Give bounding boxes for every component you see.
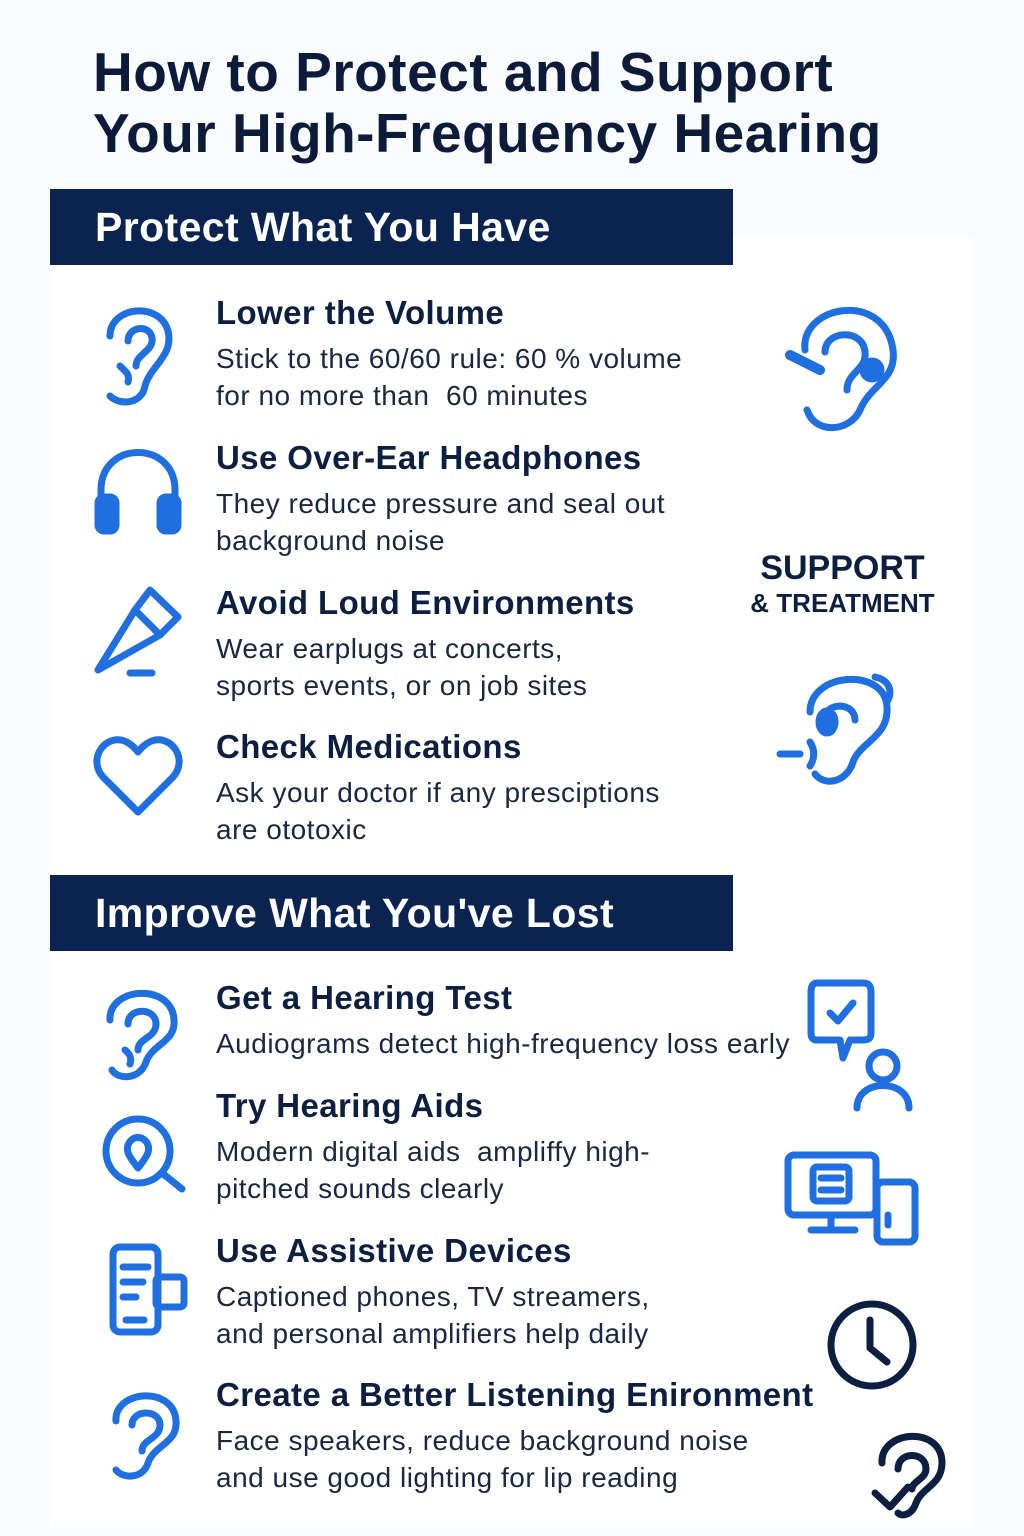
icon: ear 4 [112,1392,180,1480]
item: medications [216,728,660,845]
title: Your High-Frequency Hearing [93,102,882,164]
item: avoid loud: sports events, or on job sites [216,670,587,701]
item: listening environment: and use good lighting for lip reading [216,1462,678,1493]
card background [50,237,975,1527]
title: How to Protect and Support [93,41,833,103]
support label: SUPPORT [760,549,925,587]
item: lower volume: for no more than 60 minutes [216,380,588,411]
item: assistive [216,1232,650,1349]
item: hearing test: Audiograms detect high-frequency loss early [216,1028,790,1059]
item: listening environment [216,1376,814,1493]
item: headphones [216,439,665,556]
item: avoid loud: Avoid Loud Environments [216,584,635,621]
icon: ear [106,307,172,406]
item: listening environment: Face speakers, reduce background noise [216,1425,749,1456]
banner: improve [50,875,733,951]
item: hearing aids: pitched sounds clearly [216,1173,504,1204]
support label: & TREATMENT [750,588,935,618]
banner: improve: Improve What You've Lost [95,890,614,936]
right icon: ear check [872,1432,946,1518]
item: assistive: and personal amplifiers help daily [216,1318,649,1349]
item: avoid loud: Wear earplugs at concerts, [216,633,563,664]
item: medications: are ototoxic [216,814,367,845]
icon: heart [93,736,183,816]
item: lower volume [216,294,682,411]
icon: headphones [94,449,182,534]
banner: protect [50,189,733,265]
item: assistive: Captioned phones, TV streamers, [216,1281,650,1312]
item: medications: Ask your doctor if any presciptions [216,777,660,808]
item: hearing aids [216,1087,650,1204]
item: medications: Check Medications [216,728,522,765]
banner: protect: Protect What You Have [95,204,551,250]
item: listening environment: Create a Better Listening Enironment [216,1376,814,1413]
item: hearing aids: Modern digital aids ampliffy high- [216,1136,650,1167]
right icon: ear large [785,306,897,432]
item: headphones: Use Over-Ear Headphones [216,439,642,476]
item: hearing test: Get a Hearing Test [216,979,512,1016]
item: hearing aids: Try Hearing Aids [216,1087,483,1124]
icon: earplug [94,586,182,676]
title [93,41,882,164]
right icon: computer tablet [784,1152,918,1246]
item: avoid loud [216,584,635,701]
right icon: chat person [808,980,912,1112]
right icon: clock [828,1300,916,1390]
item: headphones: They reduce pressure and seal out [216,488,665,519]
item: headphones: background noise [216,525,445,556]
icon: phone devices [110,1244,188,1336]
item: lower volume: Lower the Volume [216,294,504,331]
icon: search pin [102,1116,186,1192]
support label [750,549,935,618]
item: hearing test [216,979,790,1059]
item: assistive: Use Assistive Devices [216,1232,572,1269]
item: lower volume: Stick to the 60/60 rule: 60 % volume [216,343,682,374]
right icon: ear with aid [776,674,894,785]
icon: ear test [106,990,178,1080]
